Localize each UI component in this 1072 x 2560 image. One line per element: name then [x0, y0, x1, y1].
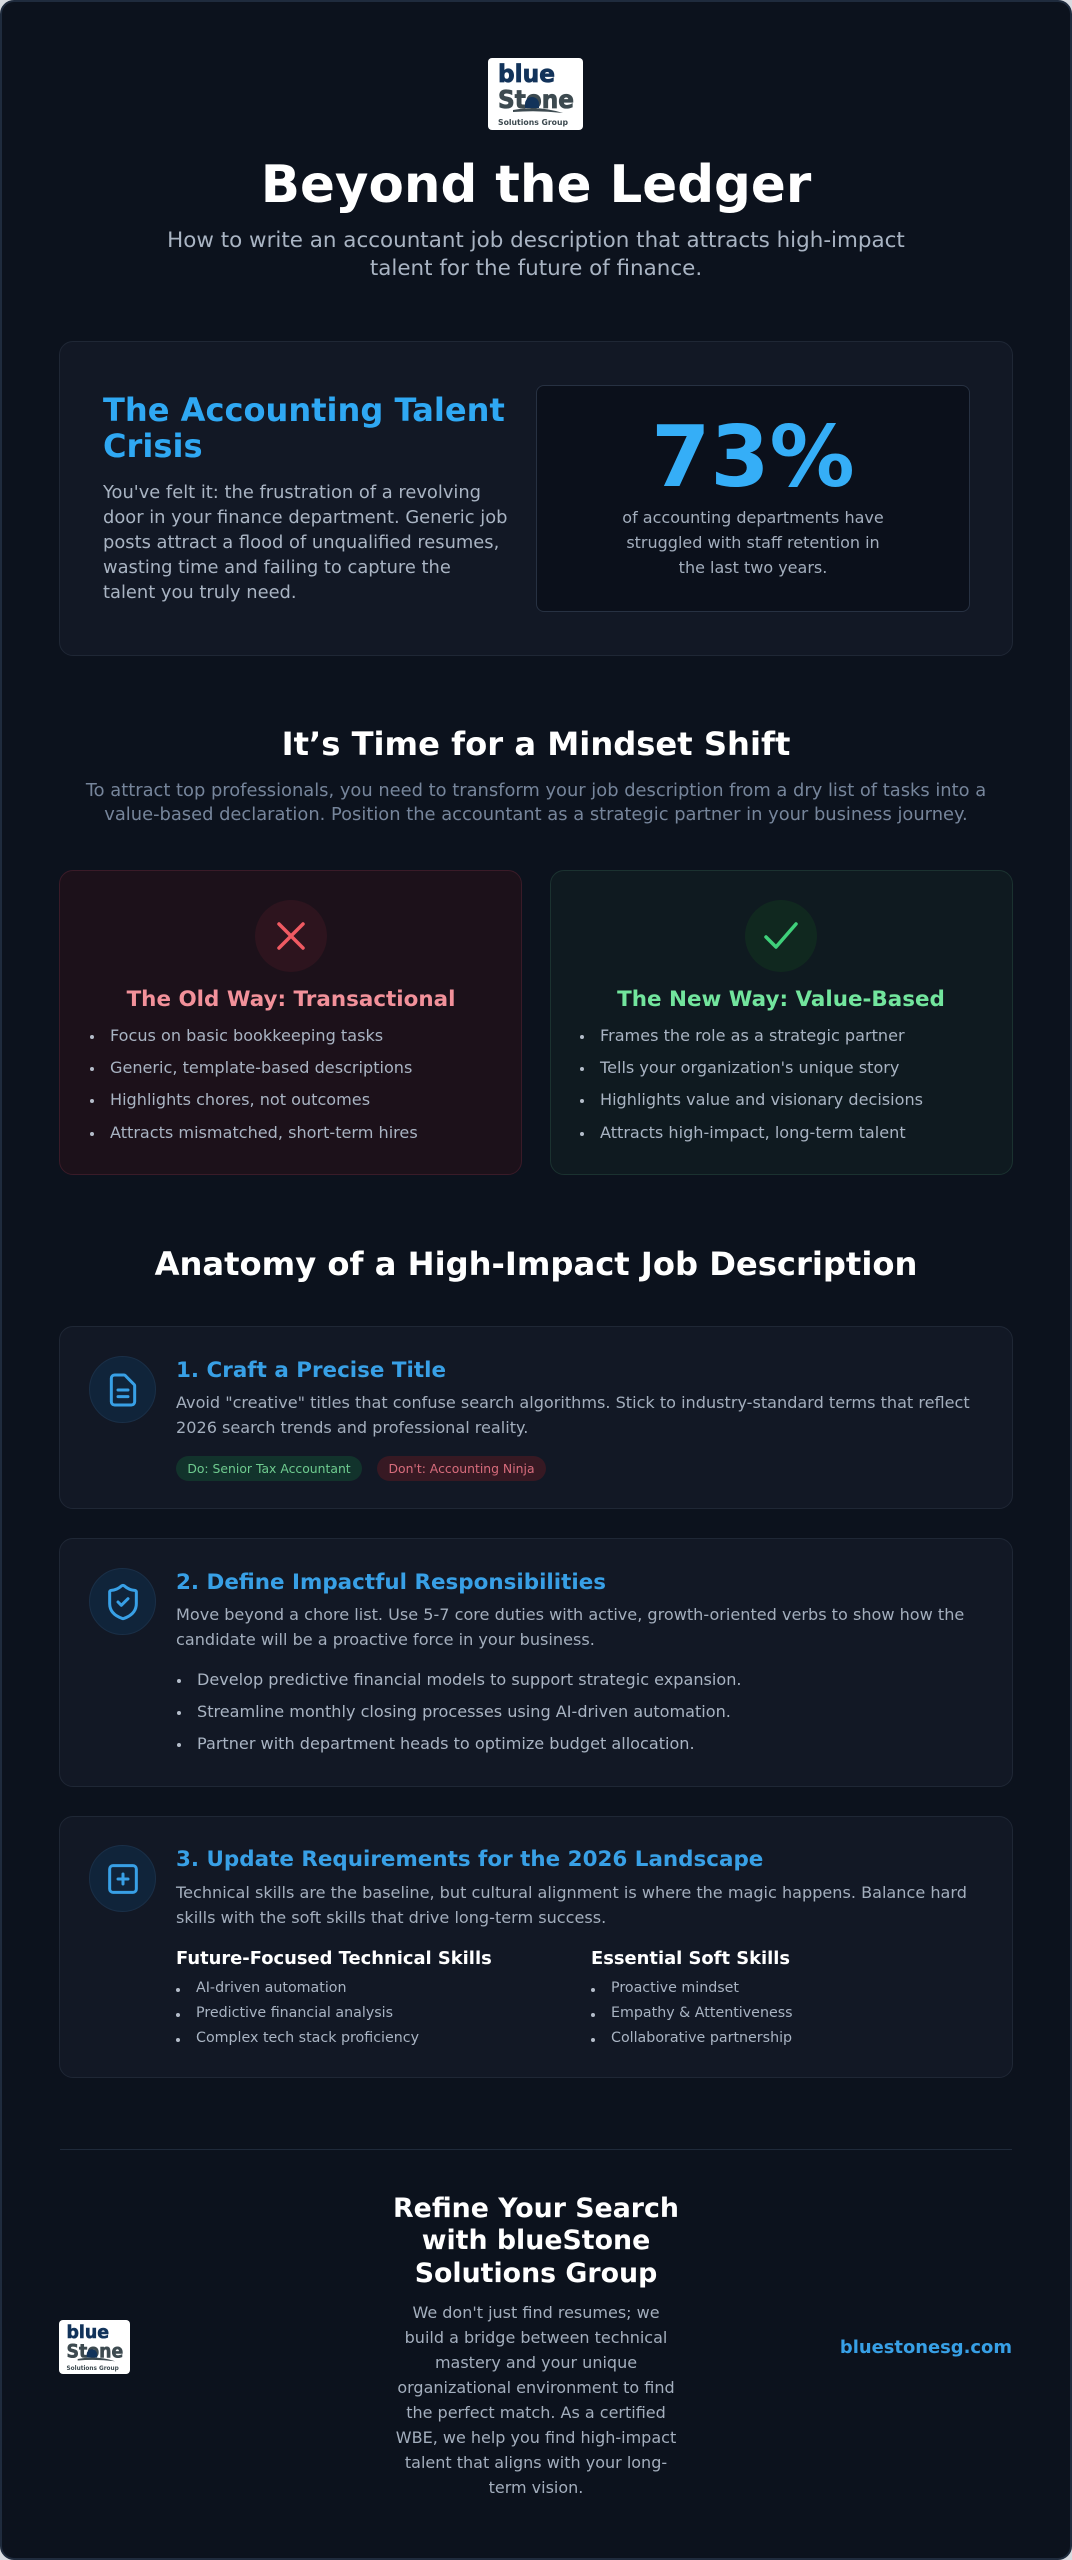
step 2 item: Streamline monthly closing processes using AI-driven automation.: [197, 1702, 731, 1721]
new way item: Frames the role as a strategic partner: [600, 1026, 905, 1045]
soft skill item: Empathy & Attentiveness: [611, 2005, 793, 2021]
step 2 item: Develop predictive financial models to support strategic expansion.: [197, 1670, 742, 1689]
stat caption: the last two years.: [679, 558, 827, 577]
icon: shield check: [89, 1568, 156, 1635]
technical skill item: AI-driven automation: [196, 1980, 347, 1996]
step 2 description: candidate will be a proactive force in your business.: [176, 1630, 595, 1649]
header logo: Solutions Group: [498, 118, 568, 127]
subtitle: [167, 228, 905, 281]
crisis body text: wasting time and failing to capture the: [103, 557, 451, 578]
heading: talent crisis: Crisis: [103, 427, 203, 465]
pill: do: Do: Senior Tax Accountant: [187, 1461, 351, 1476]
panel: step 3 requirements: [59, 1816, 1013, 2078]
pill: do: [176, 1456, 362, 1481]
panel: step 2 responsibilities: [59, 1538, 1013, 1787]
heading: talent crisis: [103, 391, 505, 465]
stat number: 73%: [651, 408, 855, 507]
footer text: build a bridge between technical: [405, 2328, 667, 2347]
mindset intro text: value-based declaration. Position the accountant as a strategic partner in your business journey.: [104, 804, 968, 824]
stat caption: of accounting departments have: [622, 508, 884, 527]
soft skills column: [591, 1948, 793, 2046]
technical skill item: Predictive financial analysis: [196, 2005, 393, 2021]
crisis body text: door in your finance department. Generic job: [103, 507, 508, 528]
header logo: Stone: [498, 85, 574, 114]
panel: old way: [59, 870, 522, 1175]
technical skill item: Complex tech stack proficiency: [196, 2030, 419, 2046]
crisis body text: [103, 482, 508, 603]
icon: plus square: [89, 1845, 156, 1912]
footer heading: Solutions Group: [415, 2258, 657, 2288]
mindset intro text: [86, 780, 986, 824]
footer heading: with blueStone: [422, 2225, 650, 2256]
crisis body text: posts attract a flood of unqualified resumes,: [103, 532, 499, 553]
new way title: The New Way: Value-Based: [617, 986, 945, 1012]
footer logo: [59, 2320, 130, 2374]
step 2 description: [176, 1605, 964, 1649]
icon: document: [89, 1356, 156, 1423]
footer text: We don't just find resumes; we: [412, 2303, 660, 2322]
icon: x mark: [255, 900, 327, 972]
crisis body text: You've felt it: the frustration of a revolving: [103, 482, 481, 503]
footer logo: Solutions Group: [66, 2365, 119, 2372]
footer text: organizational environment to find: [397, 2378, 675, 2397]
footer text: mastery and your unique: [435, 2353, 637, 2372]
stat caption: struggled with staff retention in: [626, 533, 880, 552]
header logo: [488, 58, 583, 130]
old way item: Focus on basic bookkeeping tasks: [110, 1026, 383, 1045]
pill: don't: [377, 1456, 546, 1481]
step 3 heading: 3. Update Requirements for the 2026 Landscape: [176, 1847, 763, 1872]
header logo: blue: [498, 60, 555, 88]
step 3 description: [176, 1883, 967, 1927]
old way list: [90, 1026, 418, 1142]
pill: don't: Don't: Accounting Ninja: [388, 1461, 535, 1476]
stat panel: 73%: [536, 385, 970, 612]
old way item: Highlights chores, not outcomes: [110, 1090, 370, 1109]
footer heading: Refine Your Search: [393, 2192, 679, 2224]
panel: step 1 title: [59, 1326, 1013, 1509]
step 3 description: Technical skills are the baseline, but cultural alignment is where the magic happens. Balance hard: [176, 1883, 967, 1902]
panel: new way: [550, 870, 1013, 1175]
heading: talent crisis: The Accounting Talent: [103, 391, 505, 429]
title: Beyond the Ledger: [261, 155, 811, 215]
footer logo: blue: [66, 2322, 109, 2343]
mindset intro text: To attract top professionals, you need to transform your job description from a dry list of tasks into a: [86, 780, 986, 801]
new way list: [580, 1026, 923, 1142]
footer text: WBE, we help you find high-impact: [396, 2428, 676, 2447]
step 2 item: Partner with department heads to optimize budget allocation.: [197, 1734, 695, 1753]
step 2 list: [177, 1670, 742, 1753]
soft skills heading: Essential Soft Skills: [591, 1948, 790, 1969]
footer text: [396, 2303, 676, 2497]
new way item: Highlights value and visionary decisions: [600, 1090, 923, 1109]
step 2 heading: 2. Define Impactful Responsibilities: [176, 1570, 606, 1595]
footer text: the perfect match. As a certified: [406, 2403, 666, 2422]
old way item: Attracts mismatched, short-term hires: [110, 1123, 418, 1142]
soft skill item: Collaborative partnership: [611, 2030, 792, 2046]
panel: talent crisis: [59, 341, 1013, 656]
crisis body text: talent you truly need.: [103, 582, 297, 603]
footer heading: [393, 2192, 679, 2288]
new way item: Attracts high-impact, long-term talent: [600, 1123, 906, 1142]
technical skills column: [176, 1948, 492, 2046]
stat caption: [622, 508, 884, 577]
step 1 description: [176, 1393, 970, 1437]
old way item: Generic, template-based descriptions: [110, 1058, 412, 1077]
footer text: talent that aligns with your long-: [405, 2453, 667, 2472]
subtitle: talent for the future of finance.: [370, 256, 702, 281]
step 1 heading: 1. Craft a Precise Title: [176, 1358, 446, 1383]
technical skills heading: Future-Focused Technical Skills: [176, 1948, 492, 1969]
new way item: Tells your organization's unique story: [600, 1058, 899, 1077]
old way title: The Old Way: Transactional: [127, 986, 455, 1012]
heading: anatomy: Anatomy of a High-Impact Job Description: [155, 1245, 917, 1283]
footer logo: Stone: [66, 2341, 123, 2362]
footer text: term vision.: [489, 2478, 583, 2497]
soft skill item: Proactive mindset: [611, 1980, 739, 1996]
heading: mindset shift: It’s Time for a Mindset Shift: [282, 725, 790, 763]
subtitle: How to write an accountant job description that attracts high-impact: [167, 228, 905, 253]
step 1 description: 2026 search trends and professional reality.: [176, 1418, 528, 1437]
icon: check mark: [745, 900, 817, 972]
footer website link: bluestonesg.com: [840, 2337, 1012, 2358]
step 3 description: skills with the soft skills that drive long-term success.: [176, 1908, 606, 1927]
step 1 description: Avoid "creative" titles that confuse search algorithms. Stick to industry-standard terms that reflect: [176, 1393, 970, 1412]
step 2 description: Move beyond a chore list. Use 5-7 core duties with active, growth-oriented verbs to show how the: [176, 1605, 964, 1624]
